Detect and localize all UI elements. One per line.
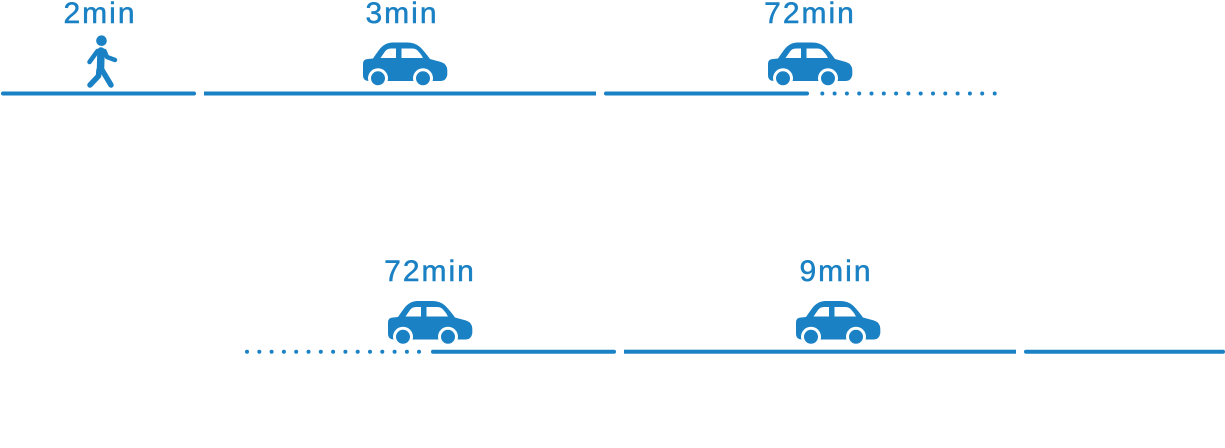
- route line lower: [431, 350, 1225, 354]
- icon: car 1: [363, 42, 447, 88]
- route line upper: [1, 92, 809, 96]
- dotted continuation lower: [245, 350, 421, 354]
- label: 9min: 9min: [799, 255, 873, 288]
- dotted continuation upper: [820, 92, 997, 96]
- icon: walking person: [90, 35, 115, 85]
- icon: car 2: [768, 42, 852, 88]
- icon: car 4: [796, 301, 880, 347]
- icon: car 3: [388, 301, 472, 347]
- label: 72min lower: 72min: [384, 255, 476, 288]
